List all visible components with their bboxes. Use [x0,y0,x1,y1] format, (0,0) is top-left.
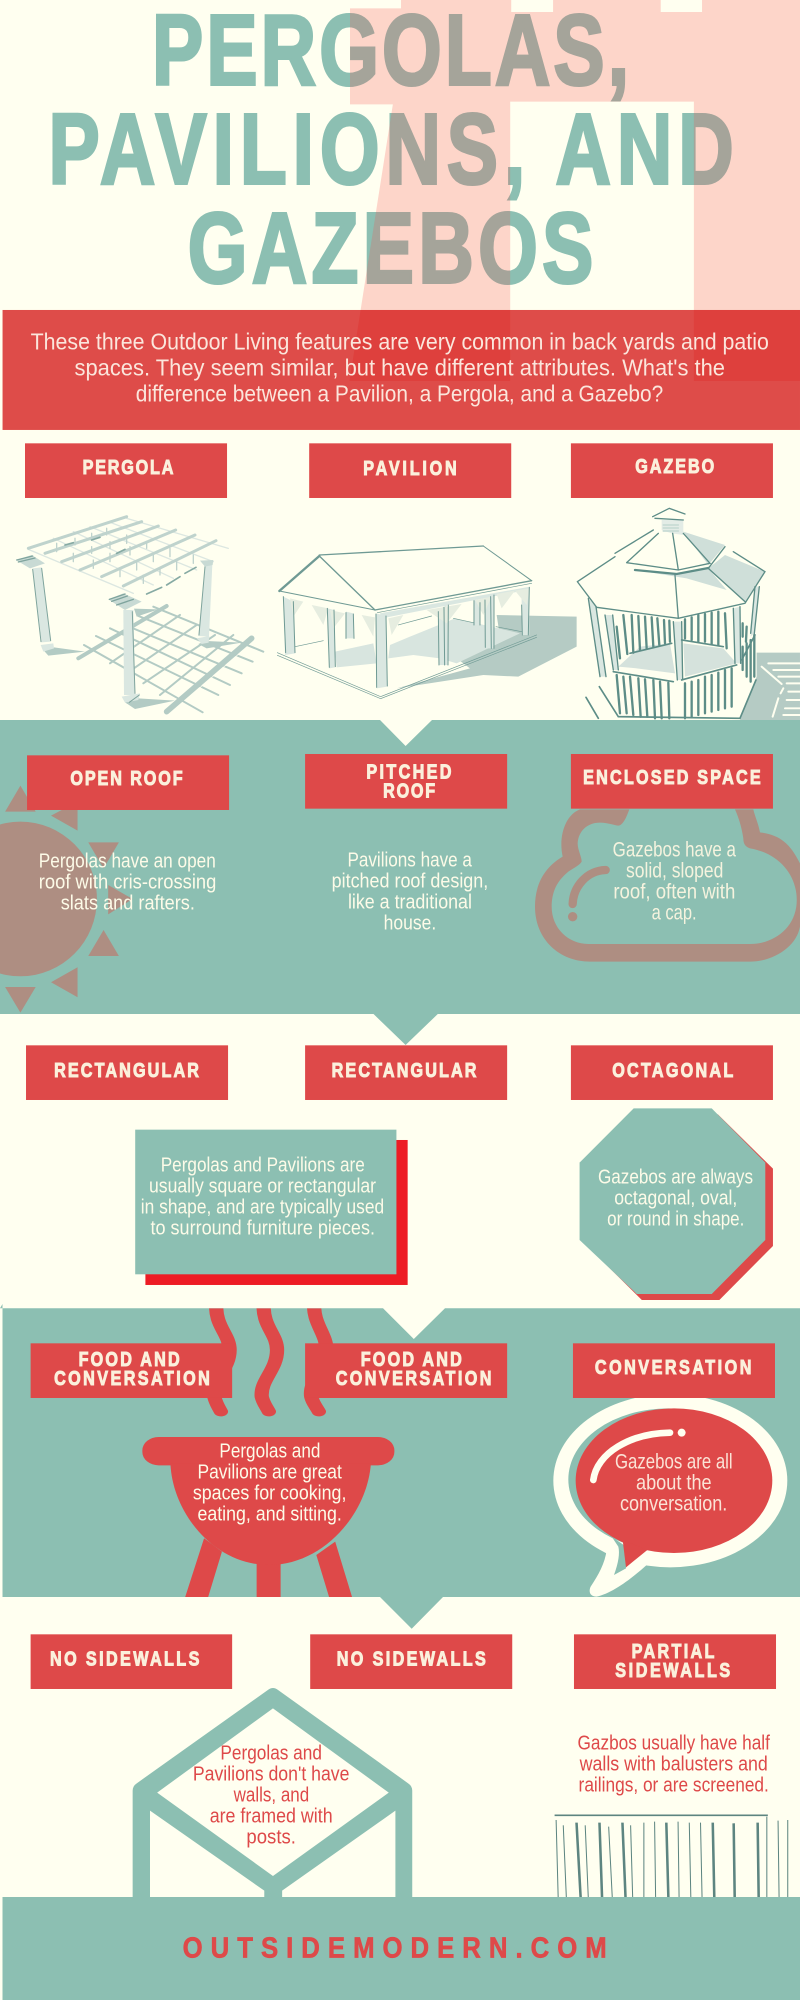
label: no sidewalls right: NO SIDEWALLS [337,1647,486,1670]
title: three lines: GAZEBOS [188,191,593,304]
text: half walls [578,1731,770,1796]
label: pitched roof [305,754,507,809]
label: gazebo [571,443,773,498]
text: pavilion roof: Pavilions have a [347,848,472,871]
illustration: gazebo [577,508,800,720]
footer band [2,1897,800,2000]
icon: speech bubble with text: Gazebos are all [615,1449,733,1474]
illustration: pergola [16,517,263,712]
icon: speech bubble with text: conversation. [620,1490,727,1515]
label: food and conversation right: FOOD AND [361,1347,462,1370]
icon: railing [555,1815,788,1897]
label: partial sidewalls: SIDEWALLS [615,1658,730,1681]
icon: speech bubble with text [553,1394,787,1597]
label: pergola [25,443,227,498]
text: pavilion roof: house. [384,911,436,934]
text: pergola roof: slats and rafters. [61,891,195,914]
icon: grill with text: Pergolas and [219,1439,320,1462]
text: gazebo roof [613,837,737,925]
label: conversation [573,1343,775,1398]
icon: grill with text: Pavilions are great [197,1460,342,1483]
text: no walls [193,1741,349,1848]
label: octagonal: OCTAGONAL [612,1058,733,1081]
panel: rectangle callout [135,1130,408,1285]
label: partial sidewalls [574,1634,776,1689]
section band: roof [0,720,800,1045]
label: no sidewalls left [31,1634,232,1689]
label: octagonal [571,1045,773,1100]
icon: sun [0,786,133,1013]
section content: roof labels and text [27,754,773,934]
label: pitched roof: PITCHED [366,760,451,783]
text: pavilion roof: like a traditional [348,890,472,913]
icon: grill with text: spaces for cooking, [193,1481,346,1504]
label: rectangular left [26,1045,228,1100]
title: three lines: PAVILIONS, AND [48,92,734,205]
label: pergola: PERGOLA [83,455,173,478]
panel: rectangle callout: Pergolas and Pavilions are [161,1153,365,1176]
icon: grill with text: eating, and sitting. [197,1502,342,1525]
text: no walls: posts. [246,1825,296,1848]
text: no walls: are framed with [210,1804,333,1827]
panel: rectangle callout: in shape, and are typically used [141,1195,384,1218]
icon: speech bubble with text: about the [636,1469,712,1494]
text: no walls: walls, and [233,1783,309,1806]
text: pergola roof: roof with cris-crossing [39,870,216,893]
label: food and conversation left: CONVERSATION [54,1366,210,1389]
label: food and conversation left [31,1343,232,1398]
text: pavilion roof: pitched roof design, [332,869,488,892]
section: names [25,443,773,498]
label: rectangular right [305,1045,507,1100]
label: open roof: OPEN ROOF [70,766,183,789]
text: gazebo roof: roof, often with [613,879,735,904]
intro band [3,310,800,430]
label: food and conversation left: FOOD AND [79,1347,180,1370]
panel: rectangle callout: to surround furniture pieces. [151,1216,375,1239]
text: no walls: Pergolas and [220,1741,322,1764]
label: partial sidewalls: PARTIAL [632,1639,714,1662]
section content: use [31,1302,775,1597]
header: title block [3,0,800,430]
footer: website: OUTSIDEMODERN.COM [183,1931,607,1964]
label: conversation: CONVERSATION [595,1355,751,1378]
text: no walls: Pavilions don't have [193,1762,349,1785]
label: open roof [27,755,229,810]
panel: octagon callout [580,1108,773,1300]
text: gazebo roof: Gazebos have a [613,837,737,862]
background: translucent pergola silhouette [349,0,800,381]
illustration: pavilion [277,546,577,699]
text: pavilion roof [332,848,488,934]
section: shape [26,1045,773,1300]
label: food and conversation right [305,1343,507,1398]
icon: house frame [133,1688,412,1898]
section: walls [31,1634,788,1898]
label: rectangular right: RECTANGULAR [332,1058,476,1081]
label: gazebo: GAZEBO [635,454,714,477]
text: gazebo roof: solid, sloped [626,858,723,883]
text: pergola roof: Pergolas have an open [39,849,216,872]
label: pavilion: PAVILION [363,456,457,479]
label: no sidewalls left: NO SIDEWALLS [50,1647,199,1670]
title: three lines [48,0,734,304]
label: enclosed space [571,754,773,809]
panel: rectangle callout: usually square or rectangular [149,1174,376,1197]
label: food and conversation right: CONVERSATION [336,1366,491,1389]
label: pitched roof: ROOF [383,779,435,802]
section band: use [0,1304,800,1629]
icon: steam [214,1302,327,1412]
label: enclosed space: ENCLOSED SPACE [583,765,761,788]
label: no sidewalls right [310,1634,512,1689]
text: gazebo roof: a cap. [652,900,697,925]
icon: cloud [535,809,800,962]
text: pergola roof [39,849,216,914]
label: rectangular left: RECTANGULAR [54,1058,199,1081]
label: pavilion [309,443,511,498]
icon: grill with text [142,1437,394,1597]
